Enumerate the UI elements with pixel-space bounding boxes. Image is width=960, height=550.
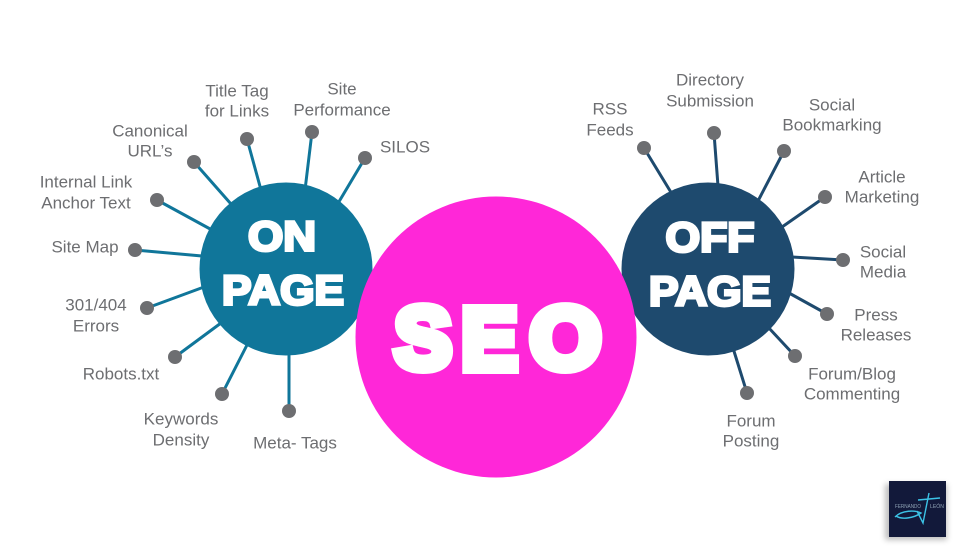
on page labels: Density <box>153 431 210 450</box>
circle: on page: ON <box>248 212 316 260</box>
circle: seo <box>356 196 636 478</box>
on page labels: Title Tag <box>205 82 269 101</box>
off page labels: Posting <box>723 432 779 451</box>
off page labels: Bookmarking <box>782 116 882 135</box>
on page labels: Site Map <box>51 238 119 257</box>
circle: off page: OFF <box>666 214 754 260</box>
on page labels: URL’s <box>127 142 173 161</box>
on page labels: 301/404 <box>65 296 127 315</box>
logo: Fernando Leon: LEÓN <box>930 503 944 510</box>
off page labels: Social <box>809 96 855 115</box>
circle: on page: PAGE <box>222 266 344 314</box>
circle: seo: S <box>394 290 452 387</box>
circle: off page <box>622 182 794 356</box>
off page labels: Press <box>854 306 898 325</box>
off page labels: Directory <box>676 71 745 90</box>
on page labels: Canonical <box>112 122 188 141</box>
off page labels: Commenting <box>804 385 900 404</box>
circle: on page <box>200 182 372 356</box>
off page labels: Media <box>860 263 907 282</box>
on page labels: Site <box>327 80 357 99</box>
circle: seo: E <box>462 291 518 388</box>
on page labels: Internal Link <box>40 173 133 192</box>
off page labels: Forum <box>726 412 776 431</box>
on page spokes and nodes <box>128 125 372 418</box>
on page labels: Performance <box>293 101 391 120</box>
off page labels: Releases <box>841 326 911 345</box>
circle: seo: O <box>530 290 601 387</box>
circle: off page: PAGE <box>649 268 771 314</box>
off page labels: Marketing <box>845 188 919 207</box>
on page labels: for Links <box>205 102 269 121</box>
on page labels: Robots.txt <box>83 365 160 384</box>
off page labels: Feeds <box>586 121 634 140</box>
on page labels: Keywords <box>144 410 218 429</box>
off page labels: Social <box>860 243 906 262</box>
off page labels: Submission <box>666 92 754 111</box>
on page labels: Meta- Tags <box>253 434 337 453</box>
off page spokes and nodes <box>637 126 850 400</box>
off page labels: Forum/Blog <box>808 365 896 384</box>
off page labels <box>586 71 919 451</box>
off page labels: Article <box>858 168 906 187</box>
on page labels: SILOS <box>380 138 430 157</box>
on page labels: Anchor Text <box>41 194 131 213</box>
on page labels: Errors <box>73 317 119 336</box>
on page labels <box>40 80 430 453</box>
logo: Fernando Leon: FERNANDO <box>895 504 921 510</box>
off page labels: RSS <box>593 100 627 119</box>
logo: Fernando Leon <box>885 481 947 540</box>
